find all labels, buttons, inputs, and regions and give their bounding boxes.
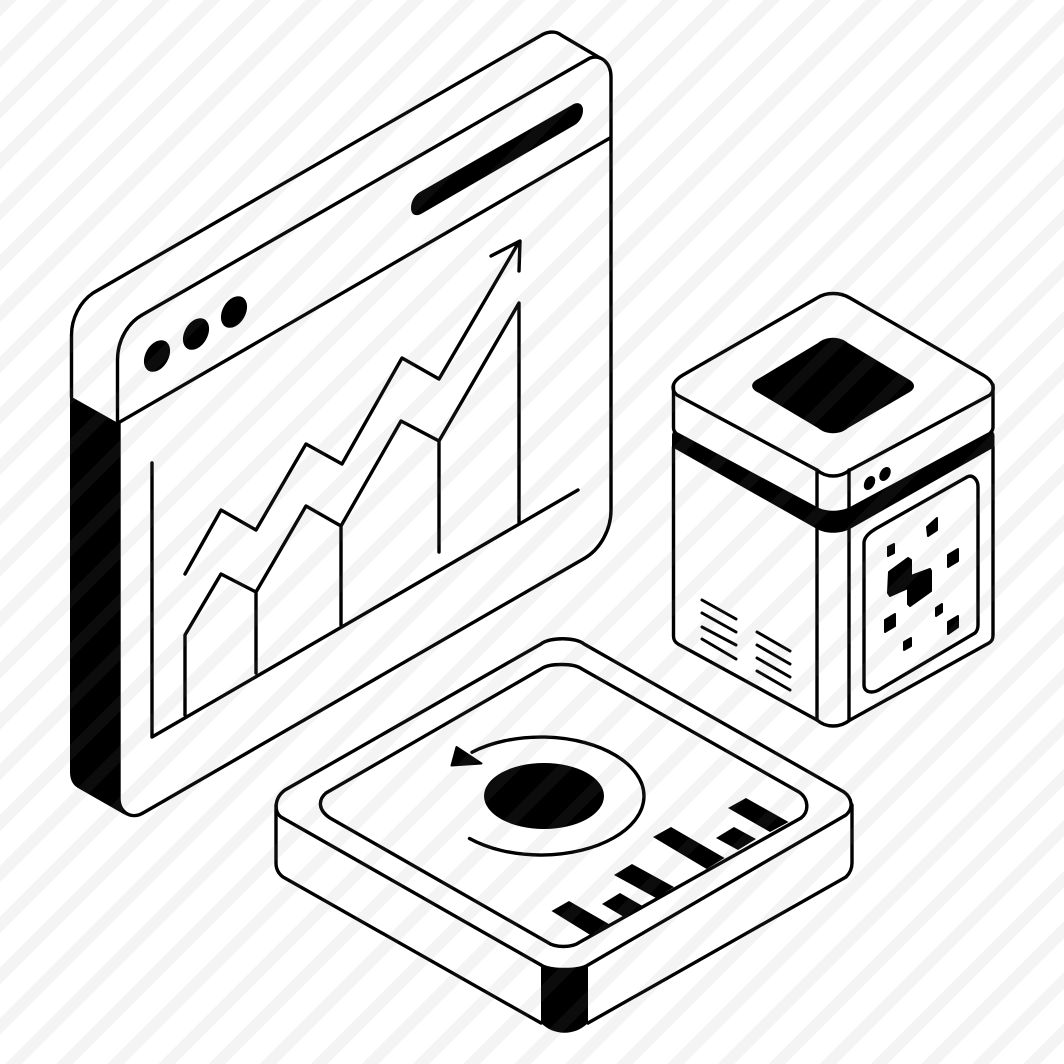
icon: address bar pill [411, 103, 583, 215]
icon: window control dots [139, 292, 252, 376]
cube lid sides [674, 385, 993, 432]
icon: black front corner [541, 964, 588, 1033]
panel: flat control device [276, 639, 852, 1033]
arrow: circular rotation [452, 737, 644, 855]
cube lid top [673, 294, 993, 476]
chart axes [152, 463, 578, 737]
window title bar divider [118, 138, 610, 423]
icon: status lights [861, 465, 893, 492]
window back edge [72, 32, 600, 397]
window front face [118, 57, 611, 816]
panel: browser window with growth chart [70, 32, 611, 816]
cube corner edges [817, 470, 849, 720]
arrow: rising trend line [185, 241, 520, 574]
device sides [276, 805, 852, 1023]
panel: server cube [672, 294, 994, 726]
icon: QR style pixels [885, 518, 958, 650]
chart area with bars [185, 303, 519, 715]
device inner screen [320, 664, 807, 946]
cube black band [672, 431, 994, 533]
icon: black window spine [70, 396, 127, 816]
icon: black square on lid [752, 338, 914, 433]
cube vent lines [702, 600, 790, 690]
icon: black dial centre [484, 763, 604, 829]
cube body [674, 447, 993, 726]
cube side panel [864, 476, 978, 692]
device top outline [276, 639, 851, 970]
bar chart on screen [552, 798, 789, 936]
